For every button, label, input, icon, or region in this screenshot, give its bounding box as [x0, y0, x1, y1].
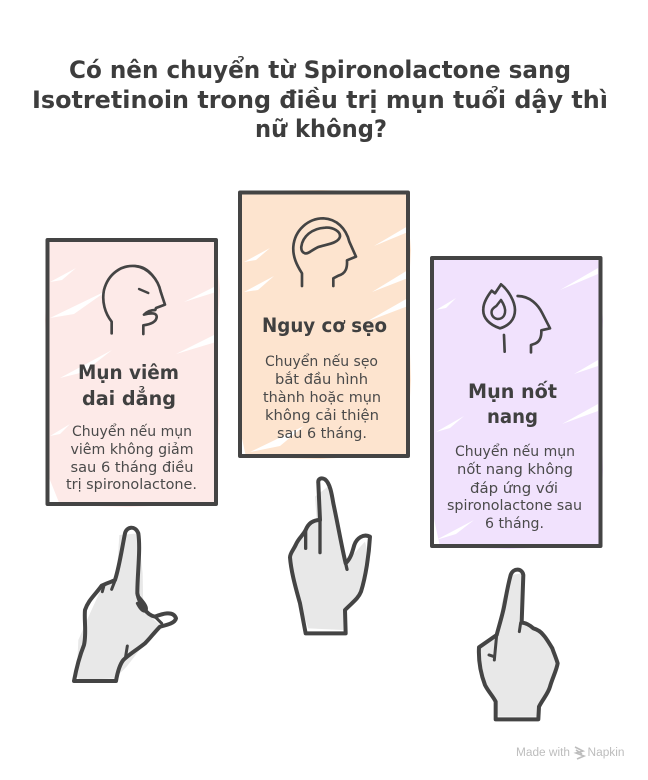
icon: head with brain	[293, 218, 356, 286]
text: scarring description	[263, 353, 381, 442]
heading: Mụn viêm dai dẳng: dai dẳng	[82, 386, 176, 410]
title: Isotretinoin trong điều trị mụn tuổi dậy thì	[32, 84, 608, 114]
text: nodulocystic description: nốt nang không	[457, 461, 573, 478]
text: nodulocystic description: Chuyển nếu mụn	[455, 443, 575, 460]
text: persistent acne description: Chuyển nếu mụn	[72, 423, 192, 440]
footer: Made with Napkin	[516, 747, 624, 759]
title: Có nên chuyển từ Spironolactone sang	[69, 54, 571, 84]
panel: nodulocystic acne	[430, 256, 603, 549]
text: scarring description: sau 6 tháng.	[277, 426, 367, 442]
heading: Mụn viêm dai dẳng: Mụn viêm	[78, 361, 179, 384]
heading: Nguy cơ sẹo: Nguy cơ sẹo	[262, 314, 387, 337]
icon: pointing hand right	[479, 570, 558, 719]
text: persistent acne description: viêm không giảm	[70, 442, 194, 458]
text: scarring description: thành hoặc mụn	[263, 390, 381, 406]
heading: Mụn nốt nang: Mụn nốt	[468, 380, 557, 403]
text: scarring description: không cải thiện	[265, 408, 379, 424]
text: nodulocystic description: đáp ứng với	[470, 481, 558, 497]
panel: persistent inflammatory acne	[45, 240, 220, 507]
icon: head with flame	[483, 284, 550, 352]
text: nodulocystic description: spironolactone sau	[447, 498, 582, 514]
heading: Mụn nốt nang	[468, 380, 557, 428]
footer: Made with Napkin: Made with	[516, 747, 570, 759]
heading: Mụn viêm dai dẳng	[78, 361, 179, 410]
heading: Mụn nốt nang: nang	[487, 405, 538, 428]
text: scarring description: bắt đầu hình	[275, 371, 368, 388]
text: scarring description: Chuyển nếu sẹo	[265, 353, 378, 370]
icon: pointing hand left	[74, 528, 176, 681]
footer: Made with Napkin: Napkin	[588, 747, 624, 759]
text: nodulocystic description	[447, 443, 582, 532]
title	[32, 54, 608, 143]
icon: head in profile with acne	[103, 266, 165, 334]
text: persistent acne description: sau 6 tháng điều	[70, 459, 194, 476]
text: nodulocystic description: 6 tháng.	[485, 516, 544, 532]
text: persistent acne description	[66, 423, 197, 493]
text: persistent acne description: trị spironolactone.	[66, 477, 197, 493]
title: nữ không?	[255, 115, 387, 143]
panel: scarring risk	[238, 190, 411, 459]
icon: pointing hand center	[290, 478, 370, 633]
